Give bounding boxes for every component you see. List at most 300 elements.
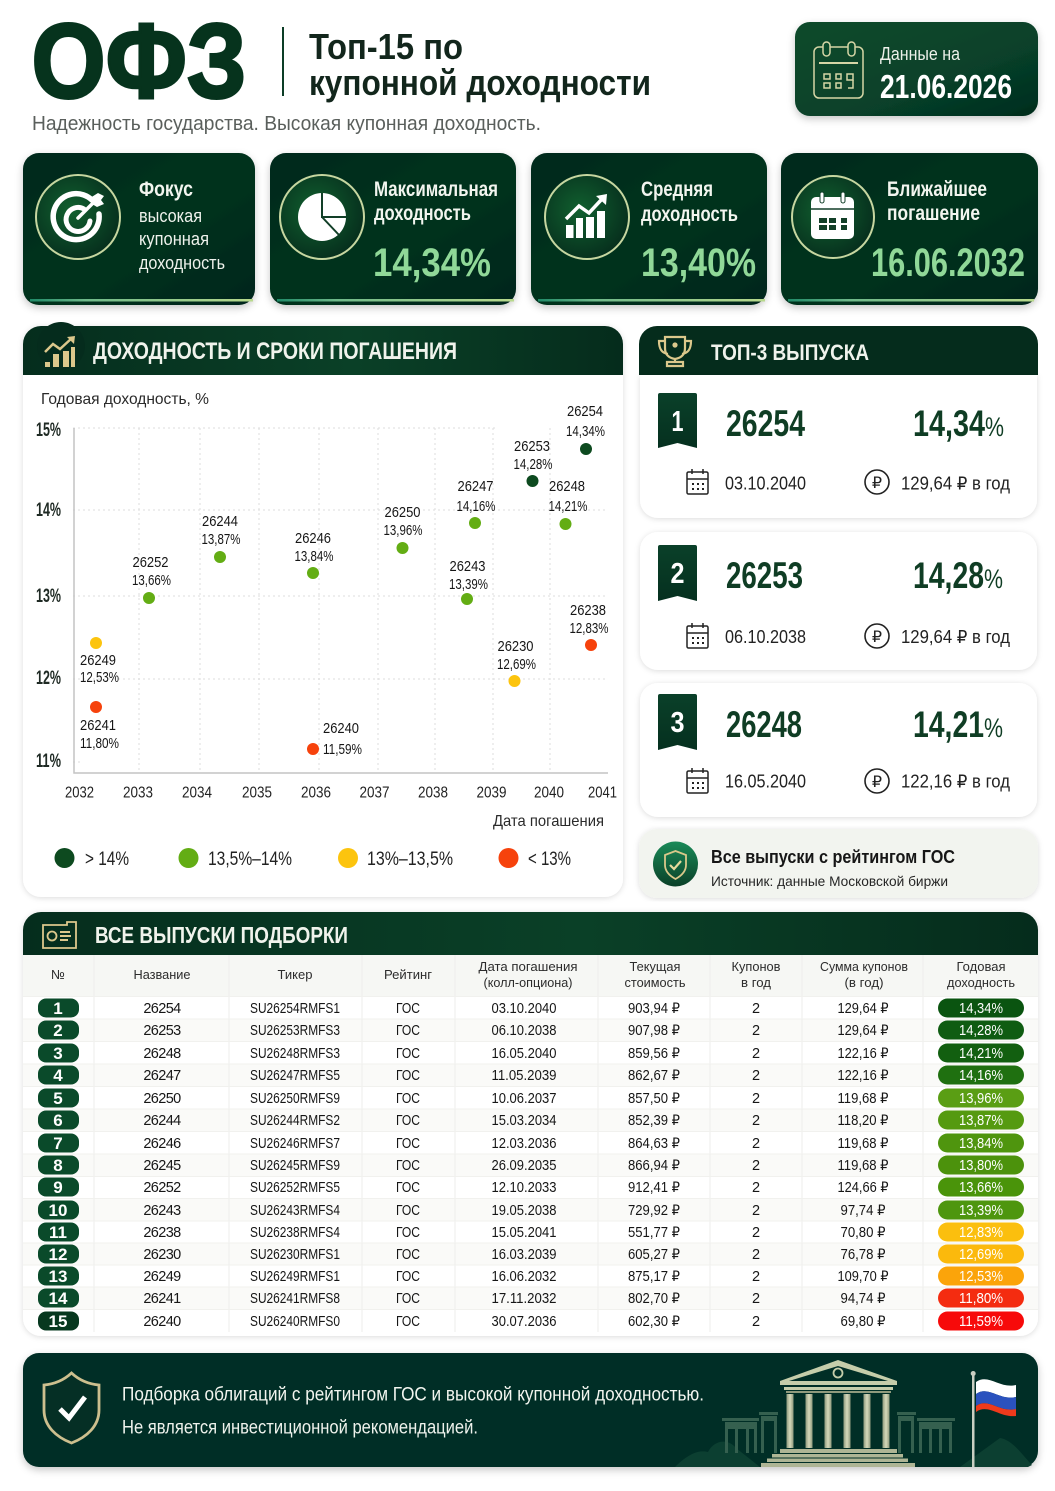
title: ОФЗ: ОФЗ — [32, 2, 246, 120]
table column headers: Текущая — [630, 959, 680, 974]
row 11: SU26238RMFS4 — [250, 1225, 340, 1241]
row 2: 06.10.2038 — [492, 1023, 556, 1039]
row 1: SU26254RMFS1 — [250, 1001, 340, 1017]
x-axis labels: 2033 — [123, 784, 153, 802]
row 3: SU26248RMFS3 — [250, 1046, 340, 1062]
yield value 2: 14,28 — [913, 555, 984, 596]
row 12: 605,27 ₽ — [628, 1247, 680, 1263]
row 14: ГОС — [396, 1291, 420, 1307]
data point 26241: 26241 — [80, 717, 116, 734]
row 6: 118,20 ₽ — [838, 1113, 888, 1129]
legend: 13%–13,5% — [367, 849, 453, 870]
row 10: 729,92 ₽ — [628, 1203, 680, 1219]
row 1: 129,64 ₽ — [838, 1001, 888, 1017]
row 5: 119,68 ₽ — [838, 1091, 888, 1107]
KPI text: max yield — [373, 178, 498, 285]
row 1: ГОС — [396, 1001, 420, 1017]
disclaimer text — [122, 1384, 704, 1438]
yield value 1: 14,34 — [913, 403, 985, 444]
row 4: SU26247RMFS5 — [250, 1068, 340, 1084]
KPI text: average yield: доходность — [641, 203, 738, 226]
KPI text: focus — [139, 178, 225, 273]
data point 26247: 26247 — [458, 478, 494, 495]
row 14: SU26241RMFS8 — [250, 1291, 340, 1307]
yield value 3: % — [984, 713, 1003, 743]
row 9: 2 — [752, 1180, 760, 1196]
icon: pie chart — [280, 175, 364, 259]
row 7: 2 — [752, 1136, 760, 1152]
row 8: SU26245RMFS9 — [250, 1158, 340, 1174]
row 11: 551,77 ₽ — [628, 1225, 680, 1241]
row 2: 14,28% — [959, 1022, 1003, 1039]
rank ribbon 1 — [658, 393, 697, 448]
row 7: 7 — [53, 1134, 63, 1153]
data point 26243 — [449, 558, 488, 605]
KPI text: max yield: доходность — [374, 202, 471, 225]
data point 26250 — [384, 504, 422, 554]
row 7 — [38, 1134, 1024, 1153]
row 14: 11,80% — [959, 1290, 1003, 1307]
row 14: 2 — [752, 1291, 760, 1307]
x-axis labels: 2032 — [65, 784, 94, 802]
row 8: 26.09.2035 — [492, 1158, 556, 1174]
row 8: 8 — [53, 1156, 63, 1175]
table column headers — [23, 955, 1038, 996]
row 10: ГОС — [396, 1203, 420, 1219]
panel: KPI nearest maturity — [781, 153, 1038, 305]
table column headers: в год — [741, 975, 771, 990]
top-3 heading: ТОП-3 ВЫПУСКА — [711, 340, 869, 365]
legend: < 13% — [528, 849, 571, 870]
data point 26241: 11,80% — [80, 735, 119, 752]
row 6: 13,87% — [959, 1112, 1003, 1129]
icon: ruble 3 — [865, 769, 889, 793]
data point 26238: 26238 — [570, 602, 606, 619]
data point 26248: 26248 — [549, 478, 585, 495]
table column headers: (колл-опциона) — [484, 975, 572, 990]
y-axis labels: 11% — [36, 751, 61, 772]
row 5: 26250 — [143, 1091, 181, 1107]
table column headers: доходность — [947, 975, 1015, 990]
data point 26253: 14,28% — [514, 456, 552, 473]
rank ribbon 2 — [658, 545, 697, 601]
row 12: ГОС — [396, 1247, 420, 1263]
row 15: 11,59% — [959, 1313, 1003, 1330]
icon: chart header — [37, 322, 85, 370]
row 12: 76,78 ₽ — [840, 1247, 886, 1263]
row 15: 69,80 ₽ — [840, 1314, 886, 1330]
table column headers: стоимость — [624, 975, 686, 990]
row 1: 903,94 ₽ — [628, 1001, 680, 1017]
row 8 — [23, 1154, 1038, 1176]
row 15: 30.07.2036 — [492, 1314, 556, 1330]
panel: top issue 1: 03.10.2040 — [725, 474, 806, 494]
data point 26246 — [294, 530, 334, 579]
icon: green shield — [653, 842, 698, 886]
row 10: 97,74 ₽ — [840, 1203, 886, 1219]
data point 26248 — [548, 478, 588, 530]
data point 26244 — [202, 513, 240, 563]
row 9: 12.10.2033 — [492, 1180, 556, 1196]
data point 26240 — [307, 720, 362, 758]
panel: KPI max yield — [270, 153, 516, 305]
rank ribbon 3: 3 — [670, 707, 684, 739]
row 13: 2 — [752, 1269, 760, 1285]
KPI text: average yield: 13,40% — [641, 241, 756, 285]
data point 26230: 26230 — [498, 638, 534, 655]
table column headers: Годовая — [956, 959, 1006, 974]
disclaimer text: Подборка облигаций с рейтингом ГОС и высокой купонной доходностью. — [122, 1384, 704, 1406]
row 9: SU26252RMFS5 — [250, 1180, 340, 1196]
KPI text: max yield: 14,34% — [373, 241, 491, 285]
row 12: 2 — [752, 1247, 760, 1263]
row 9 — [38, 1178, 1024, 1197]
row 9: 912,41 ₽ — [628, 1180, 680, 1196]
row 1: 03.10.2040 — [492, 1001, 556, 1017]
row 13: 26249 — [143, 1269, 181, 1285]
row 8: 2 — [752, 1158, 760, 1174]
data point 26247: 14,16% — [456, 498, 496, 515]
row 1: 1 — [53, 999, 63, 1018]
row 12: 12,69% — [959, 1246, 1003, 1263]
panel: top issue 2: 129,64 ₽ в год — [901, 627, 1010, 647]
data point 26254: 14,34% — [566, 423, 605, 440]
y-axis labels: 14% — [36, 500, 61, 521]
tagline: Надежность государства. Высокая купонная доходность. — [32, 113, 541, 135]
data point 26246: 26246 — [295, 530, 331, 547]
row 12: 12 — [49, 1245, 67, 1264]
row 11: 26238 — [143, 1225, 181, 1241]
panel: top issue 1: 129,64 ₽ в год — [901, 474, 1010, 494]
row 13 — [38, 1266, 1024, 1286]
x-axis labels: 2036 — [301, 784, 331, 802]
row 9: ГОС — [396, 1180, 420, 1196]
callout: rating note — [639, 829, 1038, 898]
panel: top issue 2: 06.10.2038 — [725, 627, 806, 647]
row 14: 17.11.2032 — [492, 1291, 556, 1307]
row 12: 26230 — [143, 1247, 181, 1263]
row 2: SU26253RMFS3 — [250, 1023, 340, 1039]
row 15: SU26240RMFS0 — [250, 1314, 340, 1330]
row 4: 4 — [53, 1066, 63, 1085]
x-axis labels: 2035 — [242, 784, 272, 802]
table heading: ВСЕ ВЫПУСКИ ПОДБОРКИ — [95, 922, 348, 948]
data point 26253 — [514, 438, 552, 487]
row 10: 13,39% — [959, 1202, 1003, 1219]
row 6: ГОС — [396, 1113, 420, 1129]
table column headers: (в год) — [844, 975, 884, 990]
row 3: 26248 — [143, 1046, 181, 1062]
row 3: 859,56 ₽ — [628, 1046, 680, 1062]
KPI text: focus: доходность — [139, 253, 225, 273]
y-axis labels — [36, 420, 61, 772]
icon: ruble 1 — [865, 470, 889, 494]
row 6: 6 — [53, 1111, 63, 1130]
KPI text: nearest maturity — [871, 178, 1025, 285]
row 12: SU26230RMFS1 — [250, 1247, 340, 1263]
row 4: ГОС — [396, 1068, 420, 1084]
panel: top issue 3: 26248 — [726, 704, 802, 745]
row 8: 26245 — [143, 1158, 181, 1174]
row 10 — [23, 1199, 1038, 1221]
yield value 1: % — [985, 412, 1004, 442]
panel: top issue 3: 16.05.2040 — [725, 772, 806, 792]
KPI text: nearest maturity: Ближайшее — [887, 178, 987, 201]
row 15: ГОС — [396, 1314, 420, 1330]
row 1: 26254 — [143, 1001, 181, 1017]
row 15 — [38, 1312, 1024, 1331]
panel: top issue 1 — [640, 375, 1037, 518]
row 5: 2 — [752, 1091, 760, 1107]
date value: 21.06.2026 — [880, 68, 1012, 105]
panel: KPI focus — [23, 153, 255, 305]
row 2: 129,64 ₽ — [838, 1023, 888, 1039]
yield value 2: % — [984, 564, 1003, 594]
subtitle heading: Топ-15 по — [309, 26, 463, 67]
icon: bond certificate — [43, 922, 76, 948]
row 3: 122,16 ₽ — [838, 1046, 888, 1062]
chart heading: ДОХОДНОСТЬ И СРОКИ ПОГАШЕНИЯ — [93, 338, 457, 365]
KPI text: max yield: Максимальная — [374, 178, 498, 201]
row 6: SU26244RMFS2 — [250, 1113, 340, 1129]
rank ribbon 1: 1 — [672, 406, 684, 438]
row 5: SU26250RMFS9 — [250, 1091, 340, 1107]
data point 26249 — [80, 637, 119, 686]
y-axis labels: 12% — [36, 668, 61, 689]
icon: calendar solid — [792, 176, 874, 258]
row 4: 2 — [752, 1068, 760, 1084]
data point 26249: 12,53% — [80, 669, 119, 686]
x-axis labels: 2041 — [588, 784, 617, 802]
row 1: 2 — [752, 1001, 760, 1017]
icon: calendar small 2 — [687, 623, 708, 648]
data point 26254 — [566, 403, 605, 455]
data point 26249: 26249 — [80, 652, 116, 669]
row 11: 11 — [49, 1223, 67, 1242]
data point 26243: 26243 — [450, 558, 486, 575]
icon: shield — [44, 1373, 99, 1443]
icon: calendar small 3 — [687, 768, 708, 793]
data point 26252 — [132, 554, 171, 604]
row 13: 13 — [49, 1267, 67, 1286]
row 12 — [23, 1243, 1038, 1265]
row 14: 14 — [49, 1289, 68, 1308]
rank ribbon 3 — [658, 694, 697, 750]
data point 26252: 13,66% — [132, 572, 171, 589]
row 5: 5 — [53, 1089, 63, 1108]
row 14 — [23, 1287, 1038, 1309]
panel: all issues table — [23, 912, 1038, 1336]
row 5: 10.06.2037 — [492, 1091, 556, 1107]
panel: disclaimer banner — [23, 1353, 1038, 1467]
row 15: 15 — [49, 1312, 67, 1331]
callout: rating note: Источник: данные Московской биржи — [711, 873, 948, 889]
row 15: 2 — [752, 1314, 760, 1330]
row 5 — [38, 1088, 1024, 1108]
row 4: 862,67 ₽ — [628, 1068, 680, 1084]
row 2: 2 — [53, 1021, 63, 1040]
table column headers: Название — [134, 967, 190, 982]
yield value 3: 14,21 — [913, 704, 984, 745]
data point 26247 — [456, 478, 496, 529]
row 8: 866,94 ₽ — [628, 1158, 680, 1174]
table column headers: Сумма купонов — [820, 959, 908, 974]
x-axis title: Дата погашения — [493, 813, 604, 830]
row 2: 2 — [752, 1023, 760, 1039]
panel: yield and maturity chart — [23, 322, 623, 897]
row 11: 12,83% — [959, 1224, 1003, 1241]
row 4: 26247 — [143, 1068, 181, 1084]
row 2: 26253 — [143, 1023, 181, 1039]
rank ribbon 2: 2 — [670, 558, 684, 590]
icon: growth chart — [545, 175, 629, 259]
data point 26246: 13,84% — [294, 548, 334, 565]
data point 26252: 26252 — [132, 554, 168, 571]
row 13: 875,17 ₽ — [628, 1269, 680, 1285]
table column headers: Рейтинг — [384, 967, 432, 982]
legend — [54, 848, 571, 870]
panel: top issue 2 — [640, 532, 1037, 670]
date label: Данные на — [880, 44, 961, 64]
data point 26241 — [80, 701, 119, 752]
KPI text: focus: купонная — [139, 229, 209, 249]
illustration: Russian flag — [971, 1371, 1016, 1467]
row 3: 14,21% — [959, 1045, 1003, 1062]
panel: top issue 3 — [640, 683, 1037, 817]
panel: top issue 3: 122,16 ₽ в год — [901, 772, 1010, 792]
row 11: 15.05.2041 — [492, 1225, 556, 1241]
KPI text: focus: высокая — [139, 206, 202, 226]
panel: KPI average yield — [531, 153, 767, 305]
panel: top issue 2: 26253 — [726, 555, 803, 596]
row 15: 602,30 ₽ — [628, 1314, 680, 1330]
icon: calendar outline — [814, 42, 863, 98]
data point 26254: 26254 — [567, 403, 603, 420]
y-axis labels: 15% — [36, 420, 61, 441]
row 7: ГОС — [396, 1136, 420, 1152]
row 14: 26241 — [143, 1291, 181, 1307]
row 4 — [23, 1064, 1038, 1086]
legend: > 14% — [85, 849, 129, 870]
KPI text: focus: Фокус — [139, 178, 193, 201]
legend: 13,5%–14% — [208, 849, 292, 870]
row 10: 10 — [49, 1201, 67, 1220]
icon: target — [36, 175, 120, 259]
row 6 — [23, 1109, 1038, 1131]
row 7: SU26246RMFS7 — [250, 1136, 340, 1152]
row 3: 3 — [53, 1044, 63, 1063]
x-axis labels — [65, 784, 617, 802]
row 7: 119,68 ₽ — [838, 1136, 888, 1152]
row 7: 12.03.2036 — [492, 1136, 556, 1152]
data point 26230: 12,69% — [497, 656, 536, 673]
row 2: 907,98 ₽ — [628, 1023, 680, 1039]
disclaimer text: Не является инвестиционной рекомендацией. — [122, 1418, 478, 1438]
row 1 — [38, 998, 1024, 1018]
panel: top-3 header — [639, 326, 1038, 375]
row 10: 19.05.2038 — [492, 1203, 556, 1219]
row 11: 2 — [752, 1225, 760, 1241]
row 5: 13,96% — [959, 1090, 1003, 1107]
row 10: 2 — [752, 1203, 760, 1219]
row 13: 16.06.2032 — [492, 1269, 556, 1285]
x-axis labels: 2034 — [182, 784, 212, 802]
panel: date card — [795, 22, 1038, 116]
data point 26243: 13,39% — [449, 576, 488, 593]
row 3 — [38, 1044, 1024, 1063]
row 9: 26252 — [143, 1180, 181, 1196]
icon: trophy — [659, 337, 691, 366]
KPI text: average yield — [641, 178, 756, 285]
row 6: 26244 — [143, 1113, 181, 1129]
row 10: SU26243RMFS4 — [250, 1203, 340, 1219]
subtitle heading: купонной доходности — [309, 62, 651, 103]
row 3: ГОС — [396, 1046, 420, 1062]
row 13: 109,70 ₽ — [838, 1269, 888, 1285]
row 4: 11.05.2039 — [492, 1068, 556, 1084]
data point 26238 — [570, 602, 608, 651]
table column headers: № — [51, 967, 65, 982]
panel: top issue 1: 26254 — [726, 403, 805, 444]
x-axis labels: 2039 — [476, 784, 507, 802]
data point 26250: 13,96% — [384, 522, 422, 539]
row 8: 13,80% — [959, 1157, 1003, 1174]
x-axis labels: 2037 — [360, 784, 390, 802]
icon: ruble 1: ₽ — [872, 475, 882, 492]
data point 26253: 26253 — [514, 438, 550, 455]
y-axis title: Годовая доходность, % — [41, 391, 209, 408]
row 1: 14,34% — [959, 1000, 1003, 1017]
table column headers: Купонов — [732, 959, 781, 974]
icon: ruble 2: ₽ — [872, 629, 882, 646]
x-axis labels: 2038 — [418, 784, 448, 802]
row 15: 26240 — [143, 1314, 181, 1330]
row 9: 13,66% — [959, 1179, 1003, 1196]
row 10: 26243 — [143, 1203, 181, 1219]
row 6: 852,39 ₽ — [628, 1113, 680, 1129]
data point 26240: 11,59% — [323, 741, 362, 758]
data point 26240: 26240 — [323, 720, 359, 737]
row 8: ГОС — [396, 1158, 420, 1174]
row 11: 70,80 ₽ — [840, 1225, 886, 1241]
table column headers: Дата погашения — [478, 959, 578, 974]
row 12: 16.03.2039 — [492, 1247, 556, 1263]
data point 26244: 26244 — [202, 513, 238, 530]
row 8: 119,68 ₽ — [838, 1158, 888, 1174]
row 2: ГОС — [396, 1023, 420, 1039]
row 13: SU26249RMFS1 — [250, 1269, 340, 1285]
illustration: government building — [675, 1360, 1032, 1467]
row 4: 122,16 ₽ — [838, 1068, 888, 1084]
row 9: 124,66 ₽ — [838, 1180, 888, 1196]
icon: ruble 3: ₽ — [872, 774, 882, 791]
KPI text: nearest maturity: погашение — [887, 202, 980, 225]
table column headers: Тикер — [278, 967, 312, 982]
icon: ruble 2 — [865, 624, 889, 648]
data point 26230 — [497, 638, 536, 687]
x-axis labels: 2040 — [534, 784, 564, 802]
row 13: 12,53% — [959, 1268, 1003, 1285]
row 7: 864,63 ₽ — [628, 1136, 680, 1152]
row 14: 94,74 ₽ — [840, 1291, 886, 1307]
row 6: 15.03.2034 — [492, 1113, 556, 1129]
data point 26250: 26250 — [384, 504, 420, 521]
row 3: 16.05.2040 — [492, 1046, 556, 1062]
data point 26238: 12,83% — [570, 620, 608, 637]
row 7: 26246 — [143, 1136, 181, 1152]
row 13: ГОС — [396, 1269, 420, 1285]
row 6: 2 — [752, 1113, 760, 1129]
